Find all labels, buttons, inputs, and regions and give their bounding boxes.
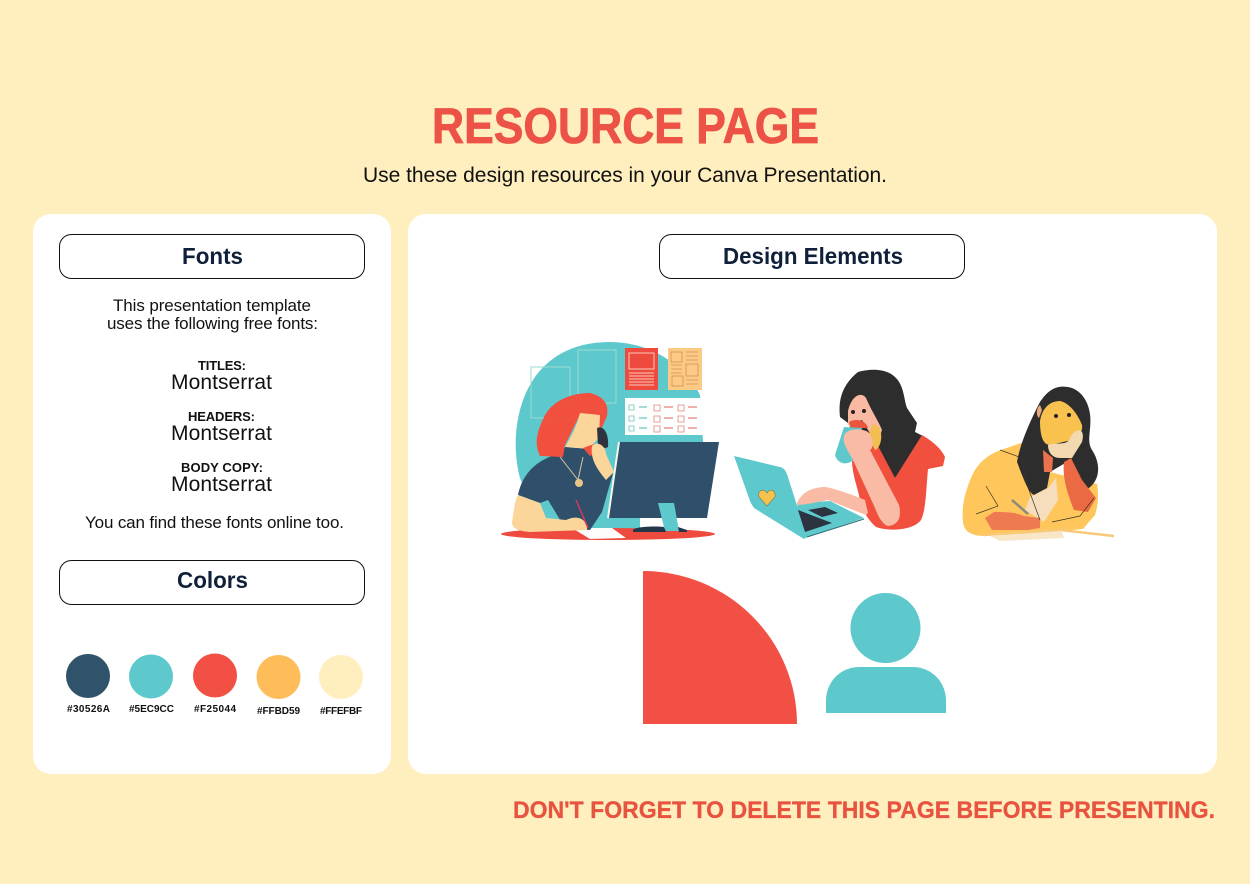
text: font intro: This presentation template <box>113 296 311 315</box>
heading: Fonts: Fonts <box>182 243 243 269</box>
text: titles font <box>171 358 272 394</box>
icon: teal person <box>826 593 946 713</box>
swatch: orange <box>256 655 300 717</box>
heading: Fonts <box>60 234 364 278</box>
swatch: red: #F25044 <box>194 704 236 715</box>
swatch: cream <box>319 655 363 717</box>
swatch: red <box>193 654 237 715</box>
text: body copy font: Montserrat <box>171 473 272 496</box>
swatch: navy: #30526A <box>67 704 110 715</box>
text: headers font <box>171 409 272 445</box>
illustration: woman writing with hand on chin <box>963 387 1114 541</box>
text: body copy font <box>171 460 272 496</box>
heading: Colors: Colors <box>177 567 248 593</box>
swatch: cream: #FFEFBF <box>320 706 362 717</box>
heading: Design Elements: Design Elements <box>723 243 903 269</box>
swatch: teal <box>129 654 174 715</box>
title: RESOURCE PAGE <box>432 98 819 154</box>
heading: Colors <box>60 560 364 604</box>
text: fonts online note: You can find these fonts online too. <box>85 513 344 532</box>
text: font intro <box>107 296 318 333</box>
swatch: navy <box>66 654 110 715</box>
illustration: woman drinking at laptop <box>734 370 945 539</box>
text: headers font: Montserrat <box>171 422 272 445</box>
text: body copy font: BODY COPY: <box>181 460 263 475</box>
text: font intro: uses the following free fonts: <box>107 314 318 333</box>
shape: red quarter circle <box>643 571 797 724</box>
illustration: woman on phone at desktop computer <box>501 342 719 540</box>
panel: design elements <box>408 214 1217 774</box>
panel: fonts and colors <box>33 214 391 774</box>
heading: Design Elements <box>660 234 964 278</box>
footer reminder: DON'T FORGET TO DELETE THIS PAGE BEFORE PRESENTING. <box>513 797 1215 824</box>
text: titles font: Montserrat <box>171 371 272 394</box>
swatch: orange: #FFBD59 <box>257 706 300 717</box>
text: headers font: HEADERS: <box>188 409 255 424</box>
subtitle: Use these design resources in your Canva Presentation. <box>363 164 887 187</box>
swatch: teal: #5EC9CC <box>129 704 174 715</box>
text: titles font: TITLES: <box>198 358 246 373</box>
